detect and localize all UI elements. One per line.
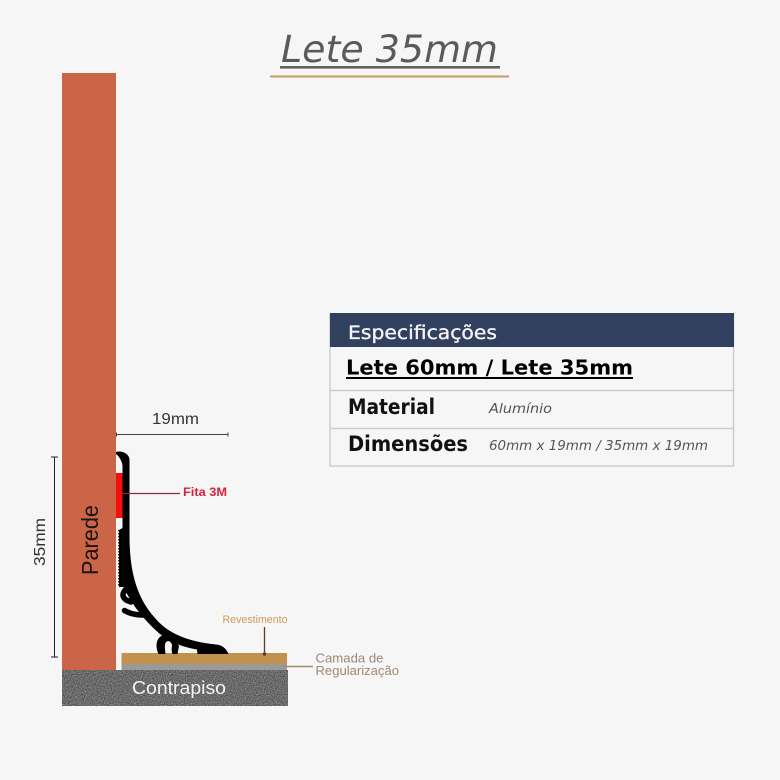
table header: Especificações — [348, 323, 497, 344]
callout: Camada de Regularização: Regularização — [316, 663, 399, 678]
panel: specifications table — [330, 313, 734, 466]
callout: Fita 3M: Fita 3M — [183, 485, 227, 499]
19mm dimension: 19mm — [152, 411, 199, 428]
profile serration — [118, 530, 120, 586]
callout: Camada de Regularização — [283, 650, 399, 678]
3M tape — [116, 473, 122, 518]
title: Lete 35mm — [281, 28, 498, 71]
panel: wall — [62, 73, 116, 670]
35mm dimension: 35mm — [32, 518, 49, 566]
upper hook — [123, 589, 131, 602]
subfloor label: Contrapiso — [132, 677, 226, 698]
callout: Fita 3M — [121, 485, 227, 499]
19mm dimension — [116, 411, 228, 436]
table dimensions row — [348, 432, 708, 456]
table dimensions row: Dimensões — [348, 432, 468, 456]
floor finish layer — [122, 653, 287, 664]
callout: Revestimento: Revestimento — [222, 614, 288, 626]
lower hook — [124, 610, 143, 615]
aluminium profile — [116, 451, 228, 654]
callout: Revestimento — [222, 614, 288, 656]
levelling layer — [122, 664, 287, 670]
table header — [330, 313, 734, 347]
35mm dimension — [32, 457, 58, 657]
panel: subfloor — [62, 670, 288, 706]
table product row: Lete 60mm / Lete 35mm — [346, 356, 633, 380]
callout: Camada de Regularização: Camada de — [316, 650, 384, 666]
wall label: Parede — [77, 505, 103, 575]
table dimensions row: 60mm x 19mm / 35mm x 19mm — [489, 438, 708, 454]
table material row: Material — [348, 395, 435, 419]
table material row: Alumínio — [488, 401, 552, 417]
table material row — [348, 395, 552, 419]
floor hook — [157, 635, 179, 654]
